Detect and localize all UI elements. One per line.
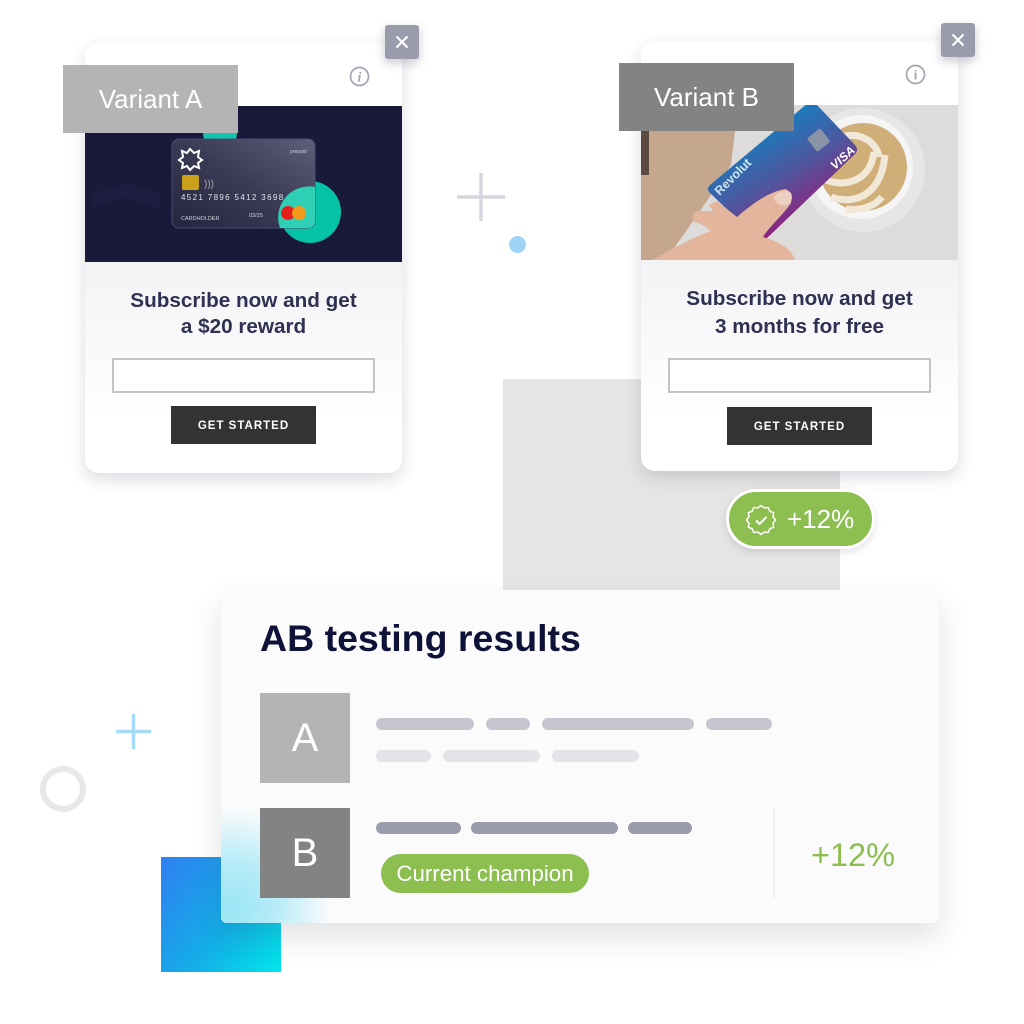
badge: +12% uplift — [726, 489, 875, 549]
panel: variant B — [641, 41, 958, 471]
headline A — [130, 289, 357, 338]
card photo B: Revolut — [712, 155, 755, 198]
card photo B: VISA — [828, 143, 858, 172]
tag: Variant A: Variant A — [99, 84, 202, 114]
row B — [260, 808, 895, 898]
close button B — [941, 23, 975, 57]
email input A — [112, 358, 375, 393]
pill: current champion — [381, 854, 589, 893]
card image A: 4521 7896 5412 3698 — [181, 193, 285, 202]
info icon B: i — [914, 68, 917, 82]
badge value: +12% — [787, 504, 854, 534]
card image A: 03/25 — [249, 213, 263, 219]
letter tile A: A — [292, 716, 318, 760]
tag: Variant B: Variant B — [654, 82, 759, 112]
info icon B — [906, 64, 926, 84]
decorative gray square — [503, 379, 840, 591]
letter tile B: B — [292, 831, 318, 875]
button A — [171, 406, 316, 444]
gradient blue square — [161, 857, 281, 972]
pill: current champion: Current champion — [396, 861, 574, 886]
close button A — [385, 25, 419, 59]
info icon A: i — [358, 70, 362, 86]
card image A: ))) — [204, 179, 214, 190]
panel heading: AB testing results — [260, 617, 581, 659]
panel: variant A — [85, 43, 402, 473]
plus sign: gray — [457, 173, 505, 221]
headline B — [686, 287, 913, 338]
row A — [260, 693, 772, 783]
button B: GET STARTED — [754, 421, 845, 433]
plus sign: blue — [116, 714, 151, 749]
tag: Variant B — [619, 63, 794, 131]
headline B: Subscribe now and get — [686, 287, 913, 310]
ring — [40, 766, 86, 812]
dot: light blue — [509, 236, 526, 253]
email input B — [668, 358, 931, 393]
result: +12%: +12% — [811, 837, 895, 873]
button A: GET STARTED — [198, 420, 289, 432]
card photo B — [641, 105, 958, 260]
headline A: a $20 reward — [181, 315, 306, 338]
headline A: Subscribe now and get — [130, 289, 357, 312]
tag: Variant A — [63, 65, 238, 133]
letter tile A — [260, 693, 350, 783]
headline B: 3 months for free — [715, 315, 884, 338]
button B — [727, 407, 872, 445]
card image A — [85, 106, 402, 262]
info icon A — [350, 66, 370, 86]
card image A: prepaid — [290, 149, 307, 155]
cyan glow — [131, 807, 331, 1007]
letter tile B — [260, 808, 350, 898]
icon: verified check — [746, 504, 776, 536]
panel: AB testing results — [221, 590, 939, 923]
card image A: CARDHOLDER — [181, 216, 220, 222]
